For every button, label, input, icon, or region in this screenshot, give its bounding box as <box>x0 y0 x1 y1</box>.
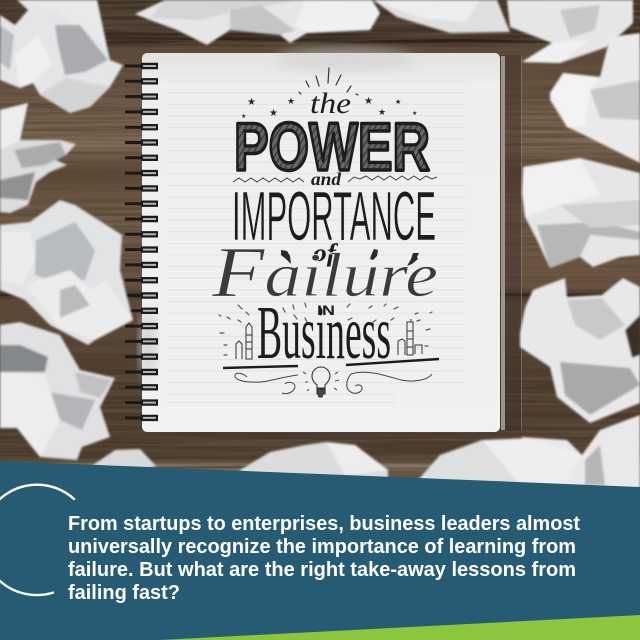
heading word: IN: IN <box>317 302 335 318</box>
intro paragraph <box>68 513 580 604</box>
heading word: and: and <box>311 169 342 189</box>
icon: sun rays <box>299 68 358 95</box>
icon: stars: ★ <box>247 97 256 108</box>
crumpled paper: bottom right <box>418 415 640 490</box>
ruled lines <box>168 81 465 403</box>
crumpled paper: right second <box>550 33 640 163</box>
crumpled paper: right third <box>522 158 640 268</box>
icon: city buildings left <box>236 323 252 359</box>
plastic notebook cover edge <box>498 55 522 431</box>
heading word: the: the <box>310 87 351 120</box>
decorative white circle arcs <box>0 485 74 595</box>
crumpled paper: bottom centre <box>93 442 388 480</box>
icon: city buildings right <box>398 319 422 355</box>
hand lettered title <box>211 68 439 397</box>
icon: stars: ★ <box>287 97 295 107</box>
wooden table background <box>0 0 640 480</box>
teal text banner <box>0 461 640 640</box>
flourish right <box>347 372 432 393</box>
crumpled paper: top right <box>507 0 633 63</box>
icon: light bulb <box>303 367 339 397</box>
icon: stars: ★ <box>412 110 417 117</box>
crumpled paper: top left <box>0 0 123 113</box>
icon: stars: ★ <box>269 108 278 119</box>
flourish left <box>235 373 298 394</box>
crumpled paper: top centre right <box>373 0 510 33</box>
crumpled paper: left second <box>0 103 76 213</box>
zigzag right <box>348 176 437 182</box>
hand lettered title: Business <box>257 291 391 375</box>
icon: stars: ★ <box>378 108 386 118</box>
zigzag left <box>233 178 304 182</box>
icon: stars: ★ <box>364 96 373 107</box>
icons: lightning bolts <box>281 249 419 266</box>
icon: stars: ★ <box>241 113 246 120</box>
green footer wedge <box>160 615 640 640</box>
crumpled paper: right fourth <box>520 278 640 423</box>
heading word: POWER: POWER <box>234 109 430 185</box>
notebook page <box>140 48 500 432</box>
intro paragraph: failing fast? <box>68 582 180 604</box>
intro paragraph: universally recognize the importance of learning from <box>68 536 576 558</box>
heading word: Failure: Failure <box>211 232 438 312</box>
crumpled paper: left third <box>0 200 133 345</box>
underline left <box>223 366 298 368</box>
icon: stars: ★ <box>395 98 401 106</box>
crumpled paper: top middle <box>135 0 380 45</box>
intro paragraph: failure. But what are the right take-away lessons from <box>68 559 576 581</box>
icon: stars <box>241 96 417 120</box>
crumpled paper: left fourth <box>0 322 115 460</box>
burst dashes <box>219 303 432 355</box>
underline right <box>346 359 439 365</box>
spiral binding <box>125 66 158 418</box>
heading word: of: of <box>313 240 339 267</box>
intro paragraph: From startups to enterprises, business leaders almost <box>68 513 580 535</box>
